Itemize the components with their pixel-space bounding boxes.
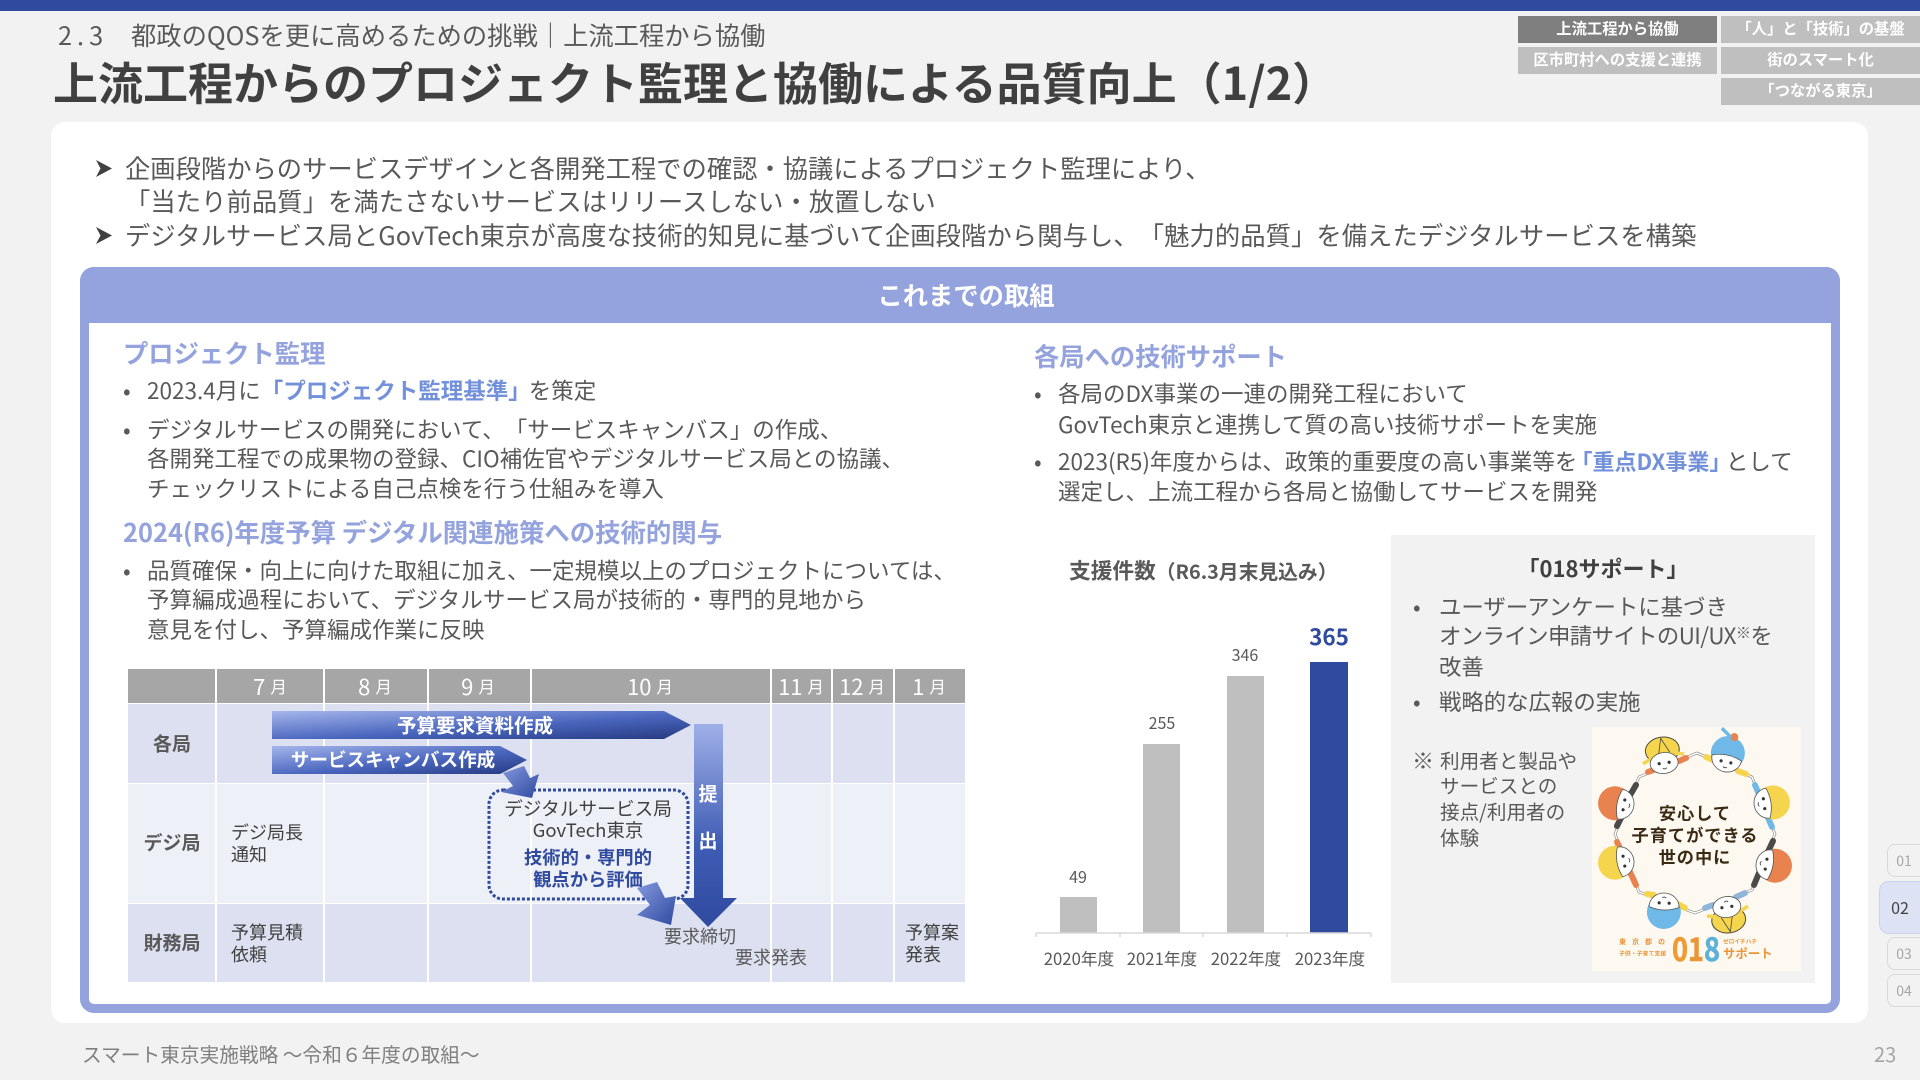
- side page tabs: 04: [1896, 981, 1912, 1001]
- dotted box: デジタルサービス局: [489, 790, 688, 899]
- 018 logo: 子供・子育て支援: [1619, 948, 1666, 958]
- children heads: [1595, 727, 1795, 936]
- cell notes: 依頼: [231, 941, 267, 967]
- footer text: スマート東京実施戦略 ～令和６年度の取組～: [82, 1039, 480, 1068]
- text block: 2024(R6)年度予算: 意見を付し、予算編成作業に反映: [147, 613, 485, 645]
- top accent bar: [0, 0, 1920, 11]
- row labels: デジ局: [143, 828, 201, 856]
- footnote: 接点/利用者の: [1440, 796, 1565, 825]
- arrow: 提出: 出: [698, 826, 718, 854]
- category labels: 2021年度: [1127, 946, 1198, 970]
- footnote: 体験: [1440, 822, 1479, 851]
- navigation tabs: top right: 「人」と「技術」の基盤: [1736, 17, 1905, 39]
- panel: これまでの取組 frame: [80, 267, 1840, 1013]
- intro bullet text: 企画段階からのサービスデザインと各開発工程での確認・協議によるプロジェクト監理により、: [125, 150, 1210, 186]
- cell notes: 予算見積: [231, 919, 303, 945]
- side page tabs: [1879, 844, 1920, 1007]
- arrow: 予算要求資料作成: [272, 710, 691, 739]
- text block: 各局への技術サポート: [1034, 338, 1793, 507]
- category labels: [1044, 946, 1366, 970]
- footnote: 利用者と製品や: [1440, 745, 1577, 774]
- navigation tabs: top right: 「つながる東京」: [1759, 79, 1882, 101]
- section subtitle: 2.3: [58, 17, 108, 53]
- ring of arms and bodies: [1615, 753, 1775, 913]
- text block: 各局への技術サポート: 選定し、上流工程から各局と協働してサービスを開発: [1058, 475, 1597, 507]
- side page tabs: 02: [1891, 895, 1909, 919]
- month header labels: 8 月: [358, 670, 392, 702]
- text block: プロジェクト監理: プロジェクト監理: [123, 335, 325, 371]
- bullet list: 改善: [1439, 650, 1484, 682]
- axis: [1036, 933, 1371, 937]
- text block: 各局への技術サポート: •: [1034, 445, 1042, 477]
- side page tabs: 03: [1896, 944, 1912, 964]
- text block: プロジェクト監理: 各開発工程での成果物の登録、CIO補佐官やデジタルサービス局との協議、: [147, 442, 904, 474]
- navigation tabs: top right: 街のスマート化: [1767, 48, 1874, 70]
- panel header: これまでの取組: [80, 267, 1840, 323]
- value labels: 365: [1309, 620, 1349, 652]
- panel heading: 「018サポート」: [1518, 552, 1688, 584]
- navigation tabs: top right: 上流工程から協働: [1556, 17, 1679, 39]
- intro bullet text: デジタルサービス局とGovTech東京が高度な技術的知見に基づいて企画段階から関与し、「魅力的品質」を備えたデジタルサービスを構築: [125, 217, 1696, 253]
- title: 上流工程からのプロジェクト監理と協働による品質向上（1/2）: [53, 48, 1337, 113]
- cell notes: 要求締切: [664, 923, 736, 949]
- slogan: 子育てができる: [1632, 822, 1758, 846]
- intro bullet text: 「当たり前品質」を満たさないサービスはリリースしない・放置しない: [125, 183, 936, 219]
- dotted box: デジタルサービス局: GovTech東京: [533, 817, 643, 843]
- value labels: 255: [1149, 710, 1175, 734]
- intro bullet text: [96, 150, 1696, 253]
- value labels: 49: [1069, 864, 1087, 888]
- footnote: [1412, 744, 1577, 851]
- text block: プロジェクト監理: •: [123, 374, 131, 406]
- month header labels: [253, 670, 946, 702]
- text block: 各局への技術サポート: GovTech東京と連携して質の高い技術サポートを実施: [1058, 408, 1597, 440]
- panel: main white card: [51, 122, 1868, 1023]
- footnote: サービスとの: [1440, 770, 1557, 799]
- month header labels: 12 月: [839, 670, 885, 702]
- month header labels: 7 月: [253, 670, 287, 702]
- 018 logo: サポート: [1723, 944, 1773, 962]
- text block: プロジェクト監理: [123, 335, 904, 504]
- text block: 2024(R6)年度予算: 2024(R6)年度予算 デジタル関連施策への技術的関与: [123, 514, 722, 550]
- panel header: これまでの取組: これまでの取組: [877, 277, 1055, 313]
- value labels: 346: [1232, 642, 1258, 666]
- month header labels: 10 月: [627, 670, 673, 702]
- value labels: [1069, 620, 1349, 888]
- bullet list: ユーザーアンケートに基づき: [1439, 590, 1728, 622]
- bars: [1060, 662, 1348, 933]
- text block: 2024(R6)年度予算: 品質確保・向上に向けた取組に加え、一定規模以上のプロジェクトについては、: [147, 554, 956, 586]
- 018 logo: 東京都の: [1619, 937, 1665, 947]
- slogan: [1632, 800, 1758, 868]
- text block: プロジェクト監理: •: [123, 413, 131, 445]
- arrow: diagonal to review box: [501, 766, 539, 798]
- row labels: [143, 730, 201, 956]
- slogan: 世の中に: [1659, 844, 1731, 868]
- panel: 018サポート: [1391, 535, 1815, 983]
- category labels: 2020年度: [1044, 946, 1115, 970]
- text block: 2024(R6)年度予算: [123, 514, 956, 645]
- 018 logo: ゼロイチハチ: [1723, 936, 1757, 946]
- bullet list: オンライン申請サイトのUI/UX※を: [1439, 619, 1772, 651]
- category labels: 2023年度: [1295, 946, 1366, 970]
- 018 logo: 018: [1672, 925, 1720, 971]
- cell notes: 発表: [905, 941, 941, 967]
- slogan: 安心して: [1659, 800, 1731, 824]
- text block: 各局への技術サポート: 2023(R5)年度からは、政策的重要度の高い事業等を「重点DX事業」として: [1058, 445, 1793, 477]
- month header labels: 1 月: [912, 670, 946, 702]
- arrow: 予算要求資料作成: 予算要求資料作成: [397, 710, 553, 738]
- bullet list: [1413, 590, 1772, 717]
- bullet list: •: [1413, 685, 1421, 717]
- text block: 各局への技術サポート: •: [1034, 377, 1042, 409]
- text block: 2024(R6)年度予算: •: [123, 554, 131, 586]
- cell notes: [231, 819, 959, 970]
- 018 logo: [1619, 925, 1773, 971]
- row labels: 財務局: [143, 928, 201, 956]
- bullet list: •: [1413, 590, 1421, 622]
- footnote: ※: [1412, 744, 1434, 776]
- schedule chart: [128, 669, 965, 982]
- bar chart: 支援件数: [1035, 554, 1372, 970]
- text block: 2024(R6)年度予算: 予算編成過程において、デジタルサービス局が技術的・専門的見地から: [147, 583, 866, 615]
- cell notes: 通知: [231, 841, 267, 867]
- navigation tabs: top right: [1518, 16, 1920, 105]
- text block: プロジェクト監理: デジタルサービスの開発において、「サービスキャンバス」の作成、: [147, 413, 842, 445]
- dotted box: デジタルサービス局: 技術的・専門的: [524, 844, 652, 870]
- chart title: 支援件数（R6.3月末見込み）: [1069, 554, 1338, 586]
- month header labels: 9 月: [461, 670, 495, 702]
- page number: 23: [1874, 1039, 1896, 1068]
- side page tabs: 01: [1896, 851, 1912, 871]
- cell notes: 要求発表: [735, 944, 807, 970]
- table background rows: [128, 669, 965, 982]
- category labels: 2022年度: [1211, 946, 1282, 970]
- text block: プロジェクト監理: チェックリストによる自己点検を行う仕組みを導入: [147, 472, 664, 504]
- cell notes: デジ局長: [231, 819, 303, 845]
- arrow: サービスキャンバス作成: サービスキャンバス作成: [291, 746, 496, 772]
- dotted box: デジタルサービス局: デジタルサービス局: [504, 794, 672, 822]
- illustration: 018 support poster: [1592, 727, 1801, 971]
- arrow: diagonal to 財務局: [637, 882, 676, 925]
- month header labels: 11 月: [778, 670, 824, 702]
- arrow: 提出: 提: [698, 780, 718, 806]
- cell notes: 予算案: [905, 919, 959, 945]
- bullet list: 戦略的な広報の実施: [1439, 685, 1641, 717]
- dotted box: デジタルサービス局: 観点から評価: [533, 866, 643, 892]
- navigation tabs: top right: 区市町村への支援と連携: [1533, 48, 1702, 70]
- text block: 各局への技術サポート: 各局のDX事業の一連の開発工程において: [1058, 377, 1468, 409]
- row labels: 各局: [153, 730, 191, 756]
- arrow: 提出: [680, 724, 737, 927]
- text block: 各局への技術サポート: 各局への技術サポート: [1034, 338, 1287, 374]
- text block: プロジェクト監理: 2023.4月に「プロジェクト監理基準」を策定: [147, 374, 596, 406]
- section subtitle: 都政のQOSを更に高めるための挑戦｜上流工程から協働: [131, 17, 765, 53]
